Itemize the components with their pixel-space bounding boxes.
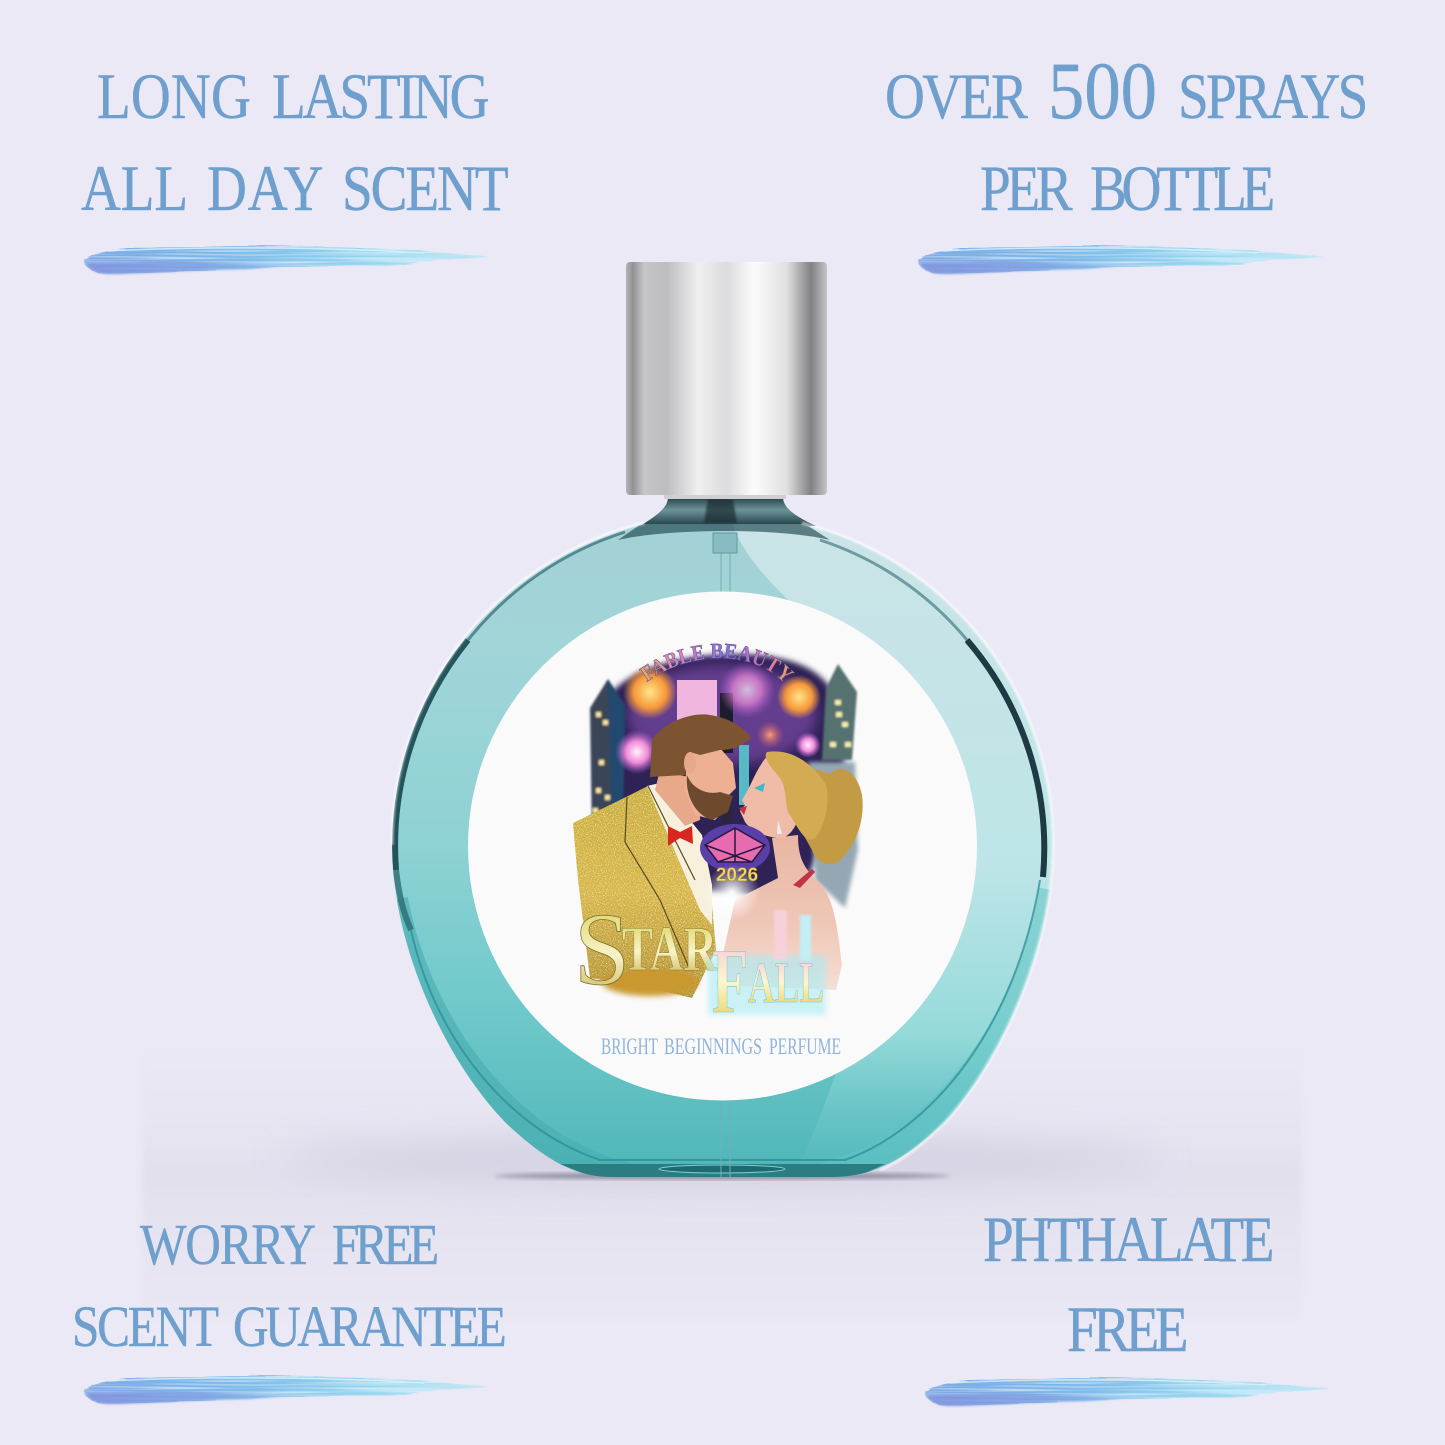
woman	[716, 751, 863, 990]
right skyscraper	[822, 664, 857, 760]
title star: S	[574, 892, 630, 1007]
shirt	[647, 783, 712, 925]
number: 500: 500	[1048, 45, 1157, 136]
silver cap	[626, 262, 827, 495]
heading: per bottle	[980, 153, 1275, 225]
brand arc text: FABLE BEAUTY	[638, 644, 795, 682]
dress strap	[793, 869, 815, 888]
base ellipse	[659, 1165, 785, 1173]
hair front	[766, 751, 828, 840]
white label	[468, 592, 977, 1100]
neck	[655, 770, 700, 826]
heading: scent guarantee: GUARANTEE	[233, 1294, 507, 1359]
heading: worry free	[140, 1212, 439, 1277]
ear	[684, 752, 696, 774]
lapel line	[625, 786, 695, 970]
heading: long lasting: LONG	[97, 61, 251, 133]
left skyscraper	[590, 679, 625, 838]
right pale reflection	[733, 505, 1060, 1165]
hair	[650, 714, 751, 777]
heading: worry free: WORRY	[140, 1212, 316, 1277]
heading: per bottle: PER	[980, 153, 1073, 225]
rim highlight	[392, 523, 1053, 1170]
heading: worry free: FREE	[332, 1212, 439, 1277]
glass body	[385, 505, 1060, 1187]
feature: worry free scent guarantee	[72, 1212, 507, 1404]
label caption: BEGINNINGS	[664, 1034, 762, 1059]
inner rim left	[395, 640, 468, 870]
dip tube	[721, 553, 730, 1187]
feature: phthalate free	[925, 1204, 1331, 1406]
eye shadow	[754, 783, 765, 792]
feature: over 500 sprays per bottle	[885, 45, 1368, 274]
label caption: PERFUME	[769, 1034, 841, 1059]
label caption	[601, 1034, 841, 1059]
feature: long lasting all day scent	[81, 61, 509, 274]
left rim tail	[396, 870, 411, 930]
perfume bottle	[385, 262, 1060, 1187]
fireworks	[615, 662, 821, 774]
tube collar	[713, 533, 737, 553]
collar	[664, 495, 786, 499]
shoulder dark band	[618, 524, 830, 540]
purple haze	[627, 665, 817, 765]
bottle neck	[640, 497, 816, 526]
woman hair bun	[795, 769, 863, 864]
heading: phthalate: PHTHALATE	[983, 1204, 1275, 1276]
night sky	[606, 654, 845, 900]
bottle shadow	[282, 1136, 1162, 1184]
title star	[574, 892, 718, 1007]
lower right building	[808, 762, 858, 908]
times square ball	[700, 824, 770, 921]
heading: all day scent: SCENT	[342, 153, 509, 225]
label caption: BRIGHT	[601, 1034, 658, 1059]
heading: all day scent: ALL	[81, 153, 188, 225]
jacket	[573, 786, 716, 998]
upper rim right	[820, 540, 967, 640]
title fall	[708, 910, 826, 1032]
beard	[687, 775, 733, 820]
neck core	[704, 499, 737, 523]
brush stroke	[84, 1376, 490, 1404]
heading: scent guarantee	[72, 1294, 507, 1359]
title fall: F	[712, 930, 748, 1032]
lower inner rim	[411, 880, 1040, 1160]
heading: sprays: SPRAYS	[1178, 61, 1368, 133]
brush stroke	[84, 246, 490, 274]
lips	[739, 806, 747, 815]
floor shading	[142, 1030, 1302, 1320]
title star: TAR	[622, 913, 718, 984]
title fall: ALL	[748, 950, 824, 1015]
face	[685, 748, 736, 820]
heading: free: FREE	[1067, 1294, 1189, 1366]
gold sparkle glow	[602, 968, 698, 996]
year text: 2026	[716, 865, 758, 886]
heading: all day scent: DAY	[207, 153, 323, 225]
heading: over: OVER	[885, 61, 1029, 133]
shoulder and torso	[716, 835, 842, 990]
bow tie	[668, 826, 693, 846]
heading: all day scent	[81, 153, 509, 225]
heading: long lasting: LASTING	[272, 61, 490, 133]
billboard	[677, 680, 717, 730]
heading: long lasting	[97, 61, 490, 133]
lower right outer band	[867, 888, 1050, 1172]
face	[740, 755, 801, 838]
earring	[777, 820, 782, 834]
inner rim right	[967, 640, 1044, 877]
base	[560, 1164, 885, 1177]
man	[573, 714, 751, 998]
brush stroke	[925, 1378, 1331, 1406]
lower left outer band	[396, 897, 604, 1177]
label illustration	[573, 644, 863, 1032]
heading: scent guarantee: SCENT	[72, 1294, 219, 1359]
upper rim left	[468, 532, 625, 640]
heading: per bottle: BOTTLE	[1090, 153, 1275, 225]
brush stroke	[918, 246, 1324, 274]
